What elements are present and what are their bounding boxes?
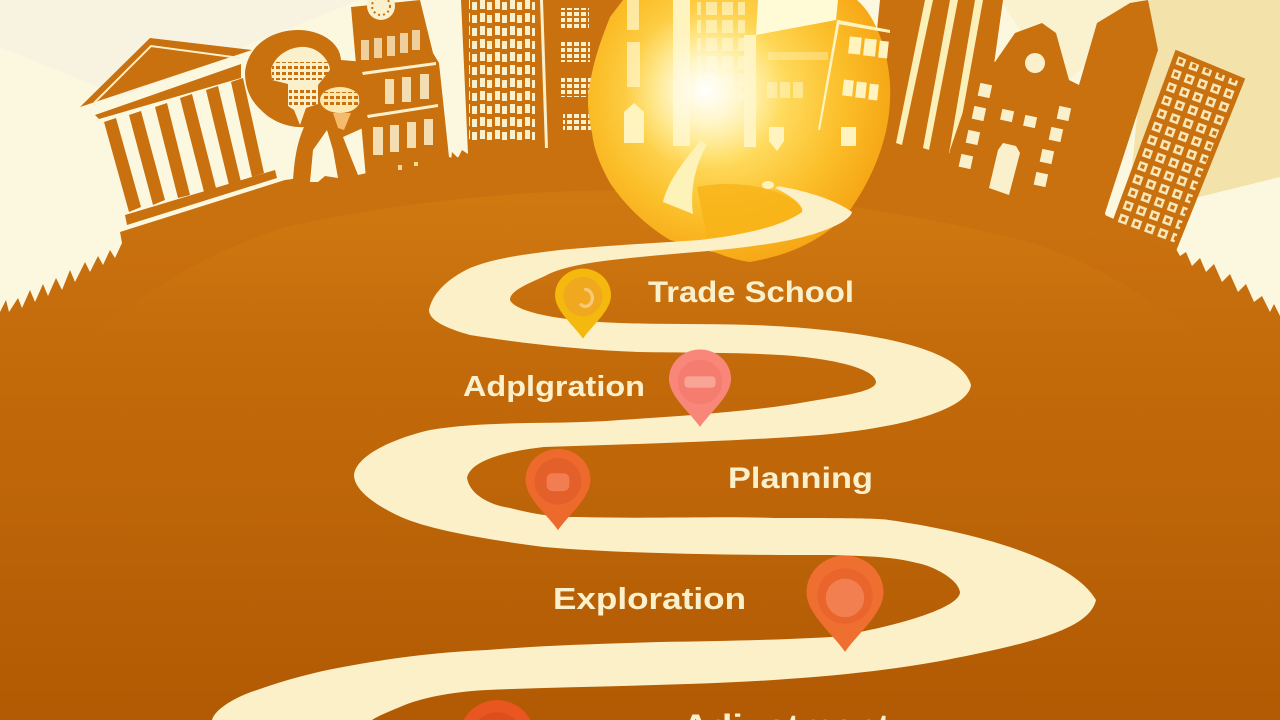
pin: trade school: [555, 269, 611, 339]
building: tree: [245, 30, 372, 193]
building: tilted lattice tower: [1113, 53, 1242, 247]
pin: application: [669, 349, 731, 427]
hill: [0, 150, 1280, 720]
building: temple: [80, 38, 277, 225]
label: planning: Planning: [728, 462, 873, 495]
building: gabled house: [940, 0, 1158, 240]
label: trade school: Trade School: [648, 276, 854, 309]
pin: adjustment: [460, 700, 534, 720]
sun with glowing city: [588, 0, 890, 262]
building: striped tower: [860, 0, 1003, 200]
pin: exploration: [806, 556, 884, 652]
label: exploration: Exploration: [553, 581, 746, 616]
sun inner buildings: [624, 0, 889, 151]
pin: planning: [526, 449, 590, 530]
hill highlight arc: [90, 190, 1200, 340]
building: tall office block: [450, 0, 640, 175]
label: application: Adplgration: [463, 371, 645, 403]
winding road: [212, 186, 1096, 720]
building: clock tower: [351, 0, 460, 190]
sun road fragment: [663, 140, 707, 214]
